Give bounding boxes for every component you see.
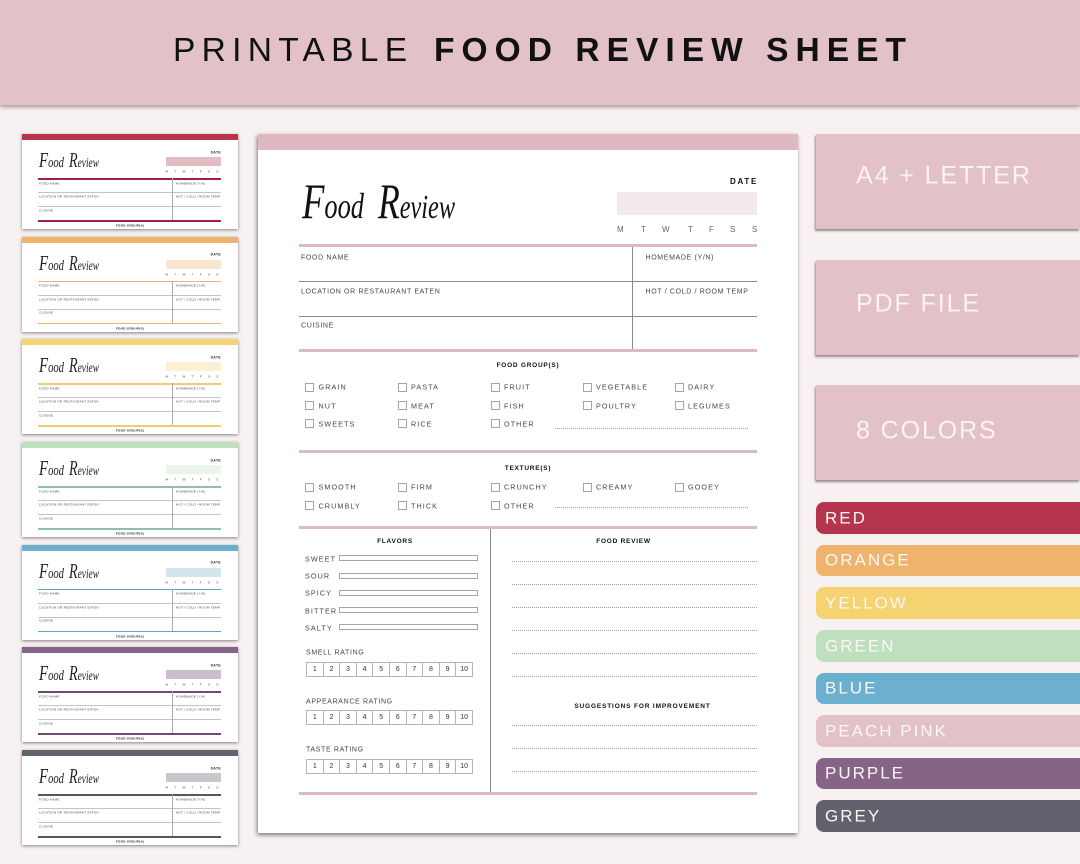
panel: grey mini sheet: HOT / COLD / ROOM TEMP [176,810,220,814]
panel: green mini sheet: M T W T F S S [166,477,219,481]
panel: red mini sheet: DATE [211,150,221,154]
panel: grey mini sheet: Review [68,764,99,788]
weekdays: S [752,224,757,234]
panel: grey mini sheet: HOMEMADE (Y/N) [176,797,205,801]
panel: yellow mini sheet: DATE [211,355,221,359]
panel: main food review sheet: 5 [379,666,383,673]
panel: red mini sheet: Review [68,148,99,172]
panel: main food review sheet: 6 [396,714,400,721]
panel: yellow mini sheet: Review [68,353,99,377]
panel: main food review sheet: SMELL RATING [306,649,364,656]
flavor scales [305,554,478,632]
heading: food groups: FOOD GROUP(S) [497,361,559,368]
panel: yellow mini sheet [22,339,238,434]
panel: blue mini sheet: DATE [211,560,221,564]
dotted lines: food review [512,561,757,677]
panel: main food review sheet: 9 [446,666,450,673]
colour pill: orange: ORANGE [825,551,911,570]
weekdays: T [688,224,693,234]
panel: blue mini sheet [22,544,238,640]
panel: main food review sheet: SALTY [305,623,333,632]
panel: main food review sheet: 7 [412,763,416,770]
checkbox list: food groups: VEGETABLE [596,382,648,391]
panel: main food review sheet: SWEET [305,554,336,563]
date box [617,192,757,215]
panel: yellow mini sheet: Food [38,353,64,377]
panel: main food review sheet: 3 [346,666,350,673]
panel: blue mini sheet: M T W T F S S [166,580,219,584]
weekdays: S [730,224,735,234]
panel: red mini sheet: CUISINE [39,208,53,212]
heading: suggestions: SUGGESTIONS FOR IMPROVEMENT [574,702,711,709]
format card: PDF file [816,260,1080,355]
checkbox list: textures: CRUMBLY [318,501,361,510]
panel: green mini sheet: FOOD NAME [39,489,60,493]
panel: purple mini sheet [22,647,238,742]
colour pill: blue: BLUE [825,679,877,698]
field labels: HOMEMADE (Y/N) [646,254,714,262]
panel: red mini sheet [22,134,238,229]
panel: yellow mini sheet: CUISINE [39,413,53,417]
panel: orange mini sheet: LOCATION OR RESTAURANT EATEN [39,297,99,301]
field labels: FOOD NAME [301,254,349,261]
script title [301,173,455,229]
panel: orange mini sheet: DATE [211,252,221,256]
checkbox list: food groups: RICE [411,419,433,428]
checkbox list: textures: OTHER [504,501,535,510]
panel: main food review sheet: BITTER [305,606,337,615]
panel: grey mini sheet: FOOD GROUP(S) [116,839,144,843]
colour pill: yellow: YELLOW [825,593,908,612]
colour pill: purple: PURPLE [825,764,905,783]
checkbox list: food groups: PASTA [411,382,439,391]
format card: PDF file: PDF FILE [856,289,981,317]
panel: blue mini sheet: Review [68,558,99,582]
panel: main food review sheet: 6 [396,763,400,770]
panel: blue mini sheet: CUISINE [39,618,53,622]
panel: main food review sheet: 8 [429,763,433,770]
panel: grey mini sheet [22,750,238,845]
panel: green mini sheet: LOCATION OR RESTAURANT EATEN [39,502,99,506]
panel: main food review sheet: 4 [363,714,367,721]
panel: main food review sheet: APPEARANCE RATING [306,698,393,705]
panel: purple mini sheet: HOT / COLD / ROOM TEMP [176,707,220,711]
panel: green mini sheet: Food [38,456,64,480]
panel: red mini sheet: FOOD NAME [39,181,60,185]
panel: purple mini sheet: LOCATION OR RESTAURANT EATEN [39,707,99,711]
panel: purple mini sheet: FOOD GROUP(S) [116,736,144,740]
panel: main food review sheet: 10 [460,714,468,721]
colour pill: orange [816,544,1080,576]
panel: main food review sheet: 1 [313,666,317,673]
panel: main food review sheet: 7 [412,714,416,721]
panel: main food review sheet: 7 [412,666,416,673]
format card: 8 colors [816,385,1080,480]
checkbox list: food groups: LEGUMES [688,401,731,410]
panel: blue mini sheet: HOMEMADE (Y/N) [176,591,205,595]
dotted lines: suggestions [512,725,757,772]
field labels: HOT / COLD / ROOM TEMP [646,288,749,295]
panel: main food review sheet: 3 [346,714,350,721]
panel: red mini sheet: M T W T F S S [166,169,219,173]
format card: 8 colors: 8 COLORS [856,416,998,444]
colour pill: red [816,502,1080,534]
colour pill: peach pink [816,715,1080,746]
checkbox list: textures: SMOOTH [318,482,357,491]
checkbox list: textures: CREAMY [596,482,633,491]
header banner [0,0,1080,105]
checkbox list: food groups: OTHER [504,419,535,428]
colour pill: purple [816,758,1080,789]
checkbox list: food groups: MEAT [411,401,435,410]
panel: blue mini sheet: FOOD NAME [39,591,60,595]
checkbox list: textures: CRUNCHY [504,482,548,491]
checkbox list: textures [305,482,748,510]
panel: purple mini sheet: CUISINE [39,721,53,725]
panel: main food review sheet: SPICY [305,588,332,597]
panel: grey mini sheet: Food [38,764,64,788]
sheet top band [258,134,798,150]
panel: main food review sheet: 9 [446,714,450,721]
colour pill: blue [816,672,1080,704]
panel: green mini sheet: CUISINE [39,516,53,520]
panel: orange mini sheet [22,236,238,332]
panel: yellow mini sheet: LOCATION OR RESTAURANT EATEN [39,399,99,403]
panel: red mini sheet: HOT / COLD / ROOM TEMP [176,194,220,198]
panel: main food review sheet: 3 [346,763,350,770]
panel: orange mini sheet: FOOD NAME [39,283,60,287]
panel: main food review sheet: 6 [396,666,400,673]
panel: green mini sheet: HOT / COLD / ROOM TEMP [176,502,220,506]
panel: main food review sheet: 5 [379,714,383,721]
panel: red mini sheet: LOCATION OR RESTAURANT EATEN [39,194,99,198]
checkbox list: food groups: FISH [504,401,525,410]
panel: purple mini sheet: M T W T F S S [166,682,219,686]
colour pill: grey: GREY [825,806,881,825]
panel: green mini sheet: Review [68,456,99,480]
panel: red mini sheet: HOMEMADE (Y/N) [176,181,205,185]
panel: orange mini sheet: HOMEMADE (Y/N) [176,283,205,287]
panel: main food review sheet: 10 [460,763,468,770]
panel: main food review sheet: 4 [363,666,367,673]
panel: orange mini sheet: FOOD GROUP(S) [116,326,144,330]
field labels [301,254,749,329]
script title: Food [301,173,365,229]
panel: orange mini sheet: Food [38,250,64,274]
panel: red mini sheet: Food [38,148,64,172]
checkbox list: food groups: DAIRY [688,382,715,391]
checkbox list: food groups: SWEETS [318,419,355,428]
panel: orange mini sheet: Review [68,250,99,274]
weekdays: W [662,224,670,234]
panel: green mini sheet: FOOD GROUP(S) [116,531,144,535]
heading: flavors: FLAVORS [377,537,413,544]
taste rating [306,746,818,806]
checkbox list: textures: GOOEY [688,482,720,491]
panel: purple mini sheet: DATE [211,663,221,667]
panel: purple mini sheet: Food [38,661,64,685]
field labels: CUISINE [301,322,334,329]
checkbox list: food groups: FRUIT [504,382,531,391]
colour pill: grey [816,800,1080,832]
panel: purple mini sheet: Review [68,661,99,685]
panel: orange mini sheet: M T W T F S S [166,272,219,276]
panel: blue mini sheet: HOT / COLD / ROOM TEMP [176,605,220,609]
panel: main food review sheet: 1 [313,714,317,721]
panel: main food review sheet: SOUR [305,571,330,580]
panel: grey mini sheet: LOCATION OR RESTAURANT EATEN [39,810,99,814]
panel: orange mini sheet: CUISINE [39,310,53,314]
panel: main food review sheet: 2 [329,763,333,770]
checkbox list: textures: THICK [411,501,438,510]
panel: grey mini sheet: M T W T F S S [166,785,219,789]
panel: main food review sheet: 9 [446,763,450,770]
panel: main food review sheet: 1 [313,763,317,770]
panel: grey mini sheet: FOOD NAME [39,797,60,801]
panel: main food review sheet: 8 [429,666,433,673]
panel: green mini sheet: DATE [211,458,221,462]
panel: yellow mini sheet: FOOD GROUP(S) [116,428,144,432]
appearance rating [306,698,473,725]
weekdays: T [641,224,646,234]
panel: yellow mini sheet: FOOD NAME [39,386,60,390]
date label: DATE [730,176,758,186]
heading: textures: TEXTURE(S) [505,464,551,471]
colour pill: red: RED [825,508,867,527]
panel: green mini sheet [22,442,238,537]
colour pill: green: GREEN [825,636,895,655]
checkbox list: food groups: GRAIN [318,382,347,391]
panel: orange mini sheet: HOT / COLD / ROOM TEMP [176,297,220,301]
panel: main food review sheet: 10 [460,666,468,673]
panel: blue mini sheet: LOCATION OR RESTAURANT EATEN [39,605,99,609]
panel: grey mini sheet: DATE [211,766,221,770]
field labels: LOCATION OR RESTAURANT EATEN [301,288,440,295]
colour pill: green [816,630,1080,662]
panel: main food review sheet: 8 [429,714,433,721]
panel: blue mini sheet: Food [38,558,64,582]
panel: main food review sheet: 2 [329,714,333,721]
panel: yellow mini sheet: M T W T F S S [166,374,219,378]
colour pill: peach pink: PEACH PINK [825,721,948,740]
checkbox list: food groups [305,382,748,429]
smell rating [306,649,473,677]
checkbox list: textures: FIRM [411,482,433,491]
panel: yellow mini sheet: HOT / COLD / ROOM TEMP [176,399,220,403]
panel: green mini sheet: HOMEMADE (Y/N) [176,489,205,493]
weekdays: F [709,224,714,234]
panel: red mini sheet: FOOD GROUP(S) [116,223,144,227]
checkbox list: food groups: NUT [318,401,337,410]
format card: A4 + letter: A4 + LETTER [856,162,1032,190]
title: PRINTABLE FOOD REVIEW SHEET [173,32,913,69]
panel: grey mini sheet: CUISINE [39,824,53,828]
panel: blue mini sheet: FOOD GROUP(S) [116,634,144,638]
panel: main food review sheet: 2 [329,666,333,673]
colour pill: yellow [816,587,1080,618]
format card: A4 + letter [816,134,1080,229]
panel: main food review sheet: 5 [379,763,383,770]
panel: purple mini sheet: HOMEMADE (Y/N) [176,694,205,698]
weekdays [617,224,757,234]
panel: yellow mini sheet: HOMEMADE (Y/N) [176,386,205,390]
checkbox list: food groups: POULTRY [596,401,637,410]
panel: main food review sheet: 4 [363,763,367,770]
heading: food review: FOOD REVIEW [596,537,651,544]
weekdays: M [617,224,624,234]
panel: purple mini sheet: FOOD NAME [39,694,60,698]
panel: main food review sheet: TASTE RATING [306,746,364,754]
sheet background [258,134,798,833]
